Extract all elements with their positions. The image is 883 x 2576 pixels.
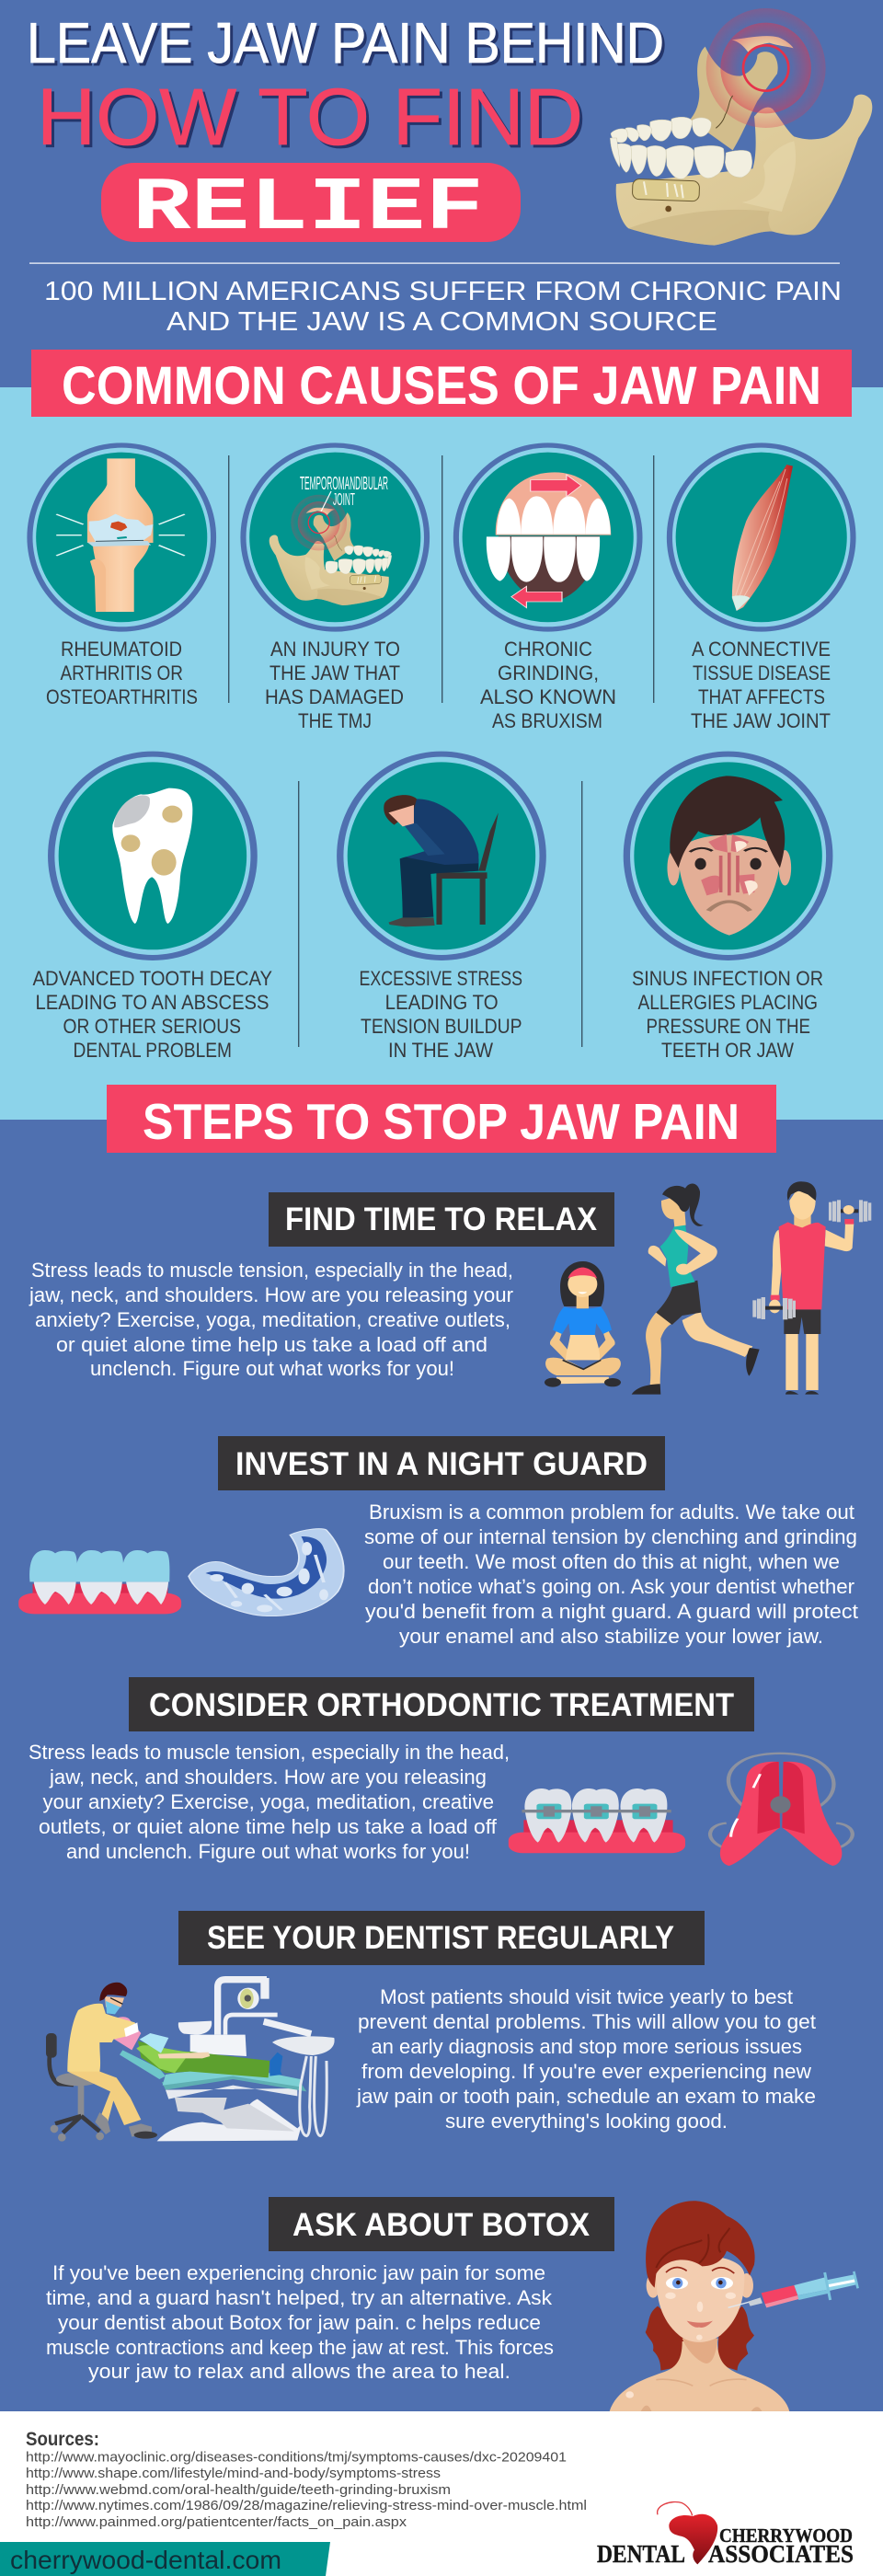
caption [632,967,823,1062]
caption: OR OTHER SERIOUS [63,1015,241,1038]
panel: causes row two [33,752,832,1062]
step text [29,1259,513,1380]
caption: THE TMJ [298,709,372,732]
cause 2: jaw injury [240,443,430,732]
caption: ALSO KNOWN [480,685,616,708]
step text: jaw pain or tooth pain, schedule an exam to make [356,2085,816,2108]
footer background: white [0,2411,883,2576]
subtitle: AND THE JAW IS A COMMON SOURCE [166,307,717,337]
caption: ARTHRITIS OR [61,661,183,684]
step text: Stress leads to muscle tension, especially in the head, [29,1741,510,1764]
step text: your dentist about Botox for jaw pain. c helps reduce [58,2311,541,2334]
icon: stressed man on chair [337,752,546,960]
source urls: http://www.shape.com/lifestyle/mind-and-body/symptoms-stress [26,2466,441,2481]
subtitle: 100 MILLION AMERICANS SUFFER FROM CHRONIC PAIN [44,277,842,306]
cause 1: knee arthritis [27,443,216,708]
panel: find time to relax [29,1181,871,1395]
step text: Most patients should visit twice yearly to best [380,1985,793,2008]
step text: outlets, or quiet alone time help us take a load off [39,1815,498,1838]
step heading: ASK ABOUT BOTOX [292,2207,591,2243]
caption: DENTAL PROBLEM [74,1039,232,1062]
joint label [300,474,388,512]
step text: sure everything's looking good. [445,2110,728,2133]
step text [364,1501,858,1648]
step text: muscle contractions and keep the jaw at rest. This forces [46,2336,554,2359]
step heading: CONSIDER ORTHODONTIC TREATMENT [149,1687,734,1723]
logo wordmark [597,2524,854,2568]
illustration: woman receiving injection [610,2201,858,2411]
caption: ADVANCED TOOTH DECAY [33,967,272,990]
caption: THE JAW JOINT [691,709,831,732]
causes section background: light blue [0,387,883,1120]
caption: PRESSURE ON THE [646,1015,810,1038]
step text: don’t notice what’s going on. Ask your dentist whether [368,1575,854,1598]
illustration: jaw bone with pain rings [610,8,872,246]
icon: muscle [667,443,856,632]
caption: AS BRUXISM [492,709,602,732]
caption [359,967,522,1062]
caption: GRINDING, [498,661,599,684]
step heading: INVEST IN A NIGHT GUARD [235,1446,648,1482]
icon: grinding teeth [453,443,643,632]
caption: TENSION BUILDUP [361,1015,522,1038]
step text: or quiet alone time help us take a load off and [56,1333,487,1356]
caption [480,638,616,732]
panel: consider orthodontic treatment [29,1677,853,1866]
step text: prevent dental problems. This will allow you to get [358,2010,816,2033]
caption: EXCESSIVE STRESS [359,967,522,990]
caption: AN INJURY TO [270,638,400,661]
step text: your anxiety? Exercise, yoga, meditation, creative [42,1790,494,1813]
heading: steps to stop jaw pain: STEPS TO STOP JAW PAIN [143,1093,740,1150]
cause 3: grinding [453,443,643,732]
panel: ask about botox [46,2197,858,2411]
title line: how to find: HOW TO FIND [37,73,583,162]
icon circle [240,443,430,632]
illustration: dentist and patient in chair [46,1978,335,2142]
step text: your jaw to relax and allows the area to heal. [88,2360,510,2383]
source urls: http://www.webmd.com/oral-health/guide/teeth-grinding-bruxism [26,2482,451,2498]
caption: A CONNECTIVE [692,638,831,661]
step heading [269,1192,614,1247]
icon: cherry heart [658,2501,717,2564]
caption: ALLERGIES PLACING [638,991,818,1014]
joint label: JOINT [333,490,355,509]
caption: THE JAW THAT [269,661,400,684]
source urls: http://www.mayoclinic.org/diseases-conditions/tmj/symptoms-causes/dxc-20209401 [26,2449,567,2466]
caption [46,638,198,708]
heading: common causes of jaw pain: COMMON CAUSES OF JAW PAIN [62,356,821,416]
caption [691,638,831,732]
step text [29,1741,510,1863]
step text: some of our internal tension by clenching and grinding [364,1525,857,1548]
relief pill [101,163,521,242]
logo: cherrywood dental associates [597,2501,854,2568]
caption: OSTEOARTHRITIS [46,685,198,708]
subtitle [44,277,842,337]
cause 7: sinus infection [624,752,832,1062]
icon: small jaw mirrored [269,495,392,605]
step text [46,2261,554,2383]
source urls [26,2449,587,2530]
panel: see your dentist regularly [46,1911,816,2142]
step text: unclench. Figure out what works for you! [90,1357,454,1380]
caption: LEADING TO [385,991,499,1014]
step text: your enamel and also stabilize your lower jaw. [399,1625,823,1648]
cause 5: tooth decay [33,752,272,1062]
source urls: http://www.nytimes.com/1986/09/28/magazine/relieving-stress-mind-over-muscle.html [26,2498,587,2513]
panel: causes row one [27,443,856,732]
caption [265,638,404,732]
step text: our teeth. We most often do this at night, when we [383,1550,840,1573]
website tab: cherrywood-dental.com [10,2546,281,2574]
step text: an early diagnosis and stop more serious issues [372,2035,802,2058]
step text: Stress leads to muscle tension, especially in the head, [31,1259,513,1282]
caption: IN THE JAW [388,1039,493,1062]
step text: you'd benefit from a night guard. A guard will protect [365,1600,858,1623]
step text: from developing. If you're ever experiencing new [361,2060,811,2083]
cause 2: jaw injury: TEMPOROMANDIBULAR [300,474,388,494]
title line: leave jaw pain behind: LEAVE JAW PAIN BEHIND [27,12,664,75]
website tab [0,2542,330,2576]
title block [27,12,664,251]
logo wordmark: ASSOCIATES [708,2540,854,2568]
caption: RHEUMATOID [61,638,182,661]
sources heading: Sources: [26,2429,99,2450]
step heading: SEE YOUR DENTIST REGULARLY [207,1920,674,1956]
icon: arthritic knee [27,443,216,632]
icon: face with sinuses [624,752,832,960]
illustration: seated woman, runner and weightlifter [545,1181,871,1395]
caption: SINUS INFECTION OR [632,967,823,990]
icon: decayed tooth [48,752,258,960]
step text: jaw, neck, and shoulders. How are you releasing [49,1765,487,1788]
step text: If you've been experiencing chronic jaw pain for some [52,2261,545,2284]
step heading [218,1436,665,1490]
step text [356,1985,816,2133]
illustration: teeth with gum and clear guard [18,1529,344,1616]
step heading [129,1677,754,1731]
caption: LEADING TO AN ABSCESS [35,991,269,1014]
caption: HAS DAMAGED [265,685,404,708]
sources list [26,2429,587,2530]
step text: time, and a guard hasn't helped, try an alternative. Ask [46,2286,553,2309]
divider line [29,263,840,264]
source urls: http://www.painmed.org/patientcenter/facts_on_pain.aspx [26,2514,407,2530]
step text: anxiety? Exercise, yoga, meditation, creative outlets, [35,1308,510,1331]
step text: Bruxism is a common problem for adults. We take out [369,1501,854,1524]
cause 6: stress [337,752,546,1062]
step text: jaw, neck, and shoulders. How are you releasing your [29,1283,513,1306]
step text: and unclench. Figure out what works for you! [66,1840,470,1863]
illustration: braces and retainer [509,1754,853,1866]
caption: TEETH OR JAW [661,1039,794,1062]
cause 4: connective tissue disease [667,443,856,732]
step heading: FIND TIME TO RELAX [285,1202,598,1237]
panel: invest in a night guard [18,1436,858,1648]
step heading [269,2197,614,2251]
step heading [178,1911,705,1965]
caption: TISSUE DISEASE [693,661,831,684]
logo wordmark: CHERRYWOOD [719,2524,853,2547]
logo wordmark: DENTAL [597,2540,685,2568]
relief word: RELIEF [132,166,484,251]
caption [33,967,272,1062]
caption: CHRONIC [504,638,592,661]
caption: THAT AFFECTS [698,685,825,708]
